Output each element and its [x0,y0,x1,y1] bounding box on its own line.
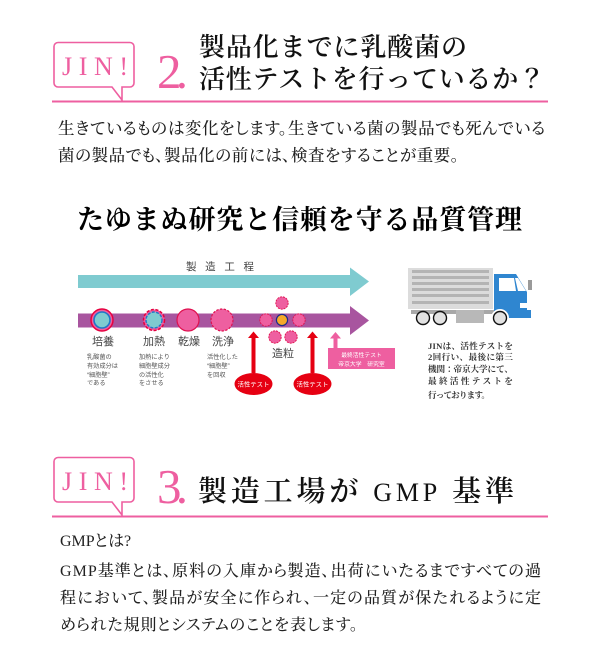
icon: culture circle [91,309,113,331]
step label: heating: の活性化 [139,371,164,379]
step label: heating [139,335,171,387]
section 2 header [52,33,548,102]
text block: section 3 body: GMP基準とは、原料の入庫から製造、出荷にいたるまですべての過 [60,561,541,580]
arrow and badge: activity test 1 [234,332,272,395]
step label: washing: 洗浄 [212,334,234,348]
speech bubble: JIN!: JIN! [62,467,128,496]
process diagram [78,260,532,400]
number 3: 3. [157,459,188,514]
step label: drying: 乾燥 [178,335,200,348]
arrow and badge: activity test 2 [294,332,332,395]
text block: truck note: 行っております。 [428,389,490,400]
speech bubble: JIN!: JIN! [62,52,128,81]
step label: washing: “細胞壁” [207,362,230,370]
step label: culture: 有効成分は [87,362,118,370]
speech bubble: JIN! [54,458,134,515]
text block: truck note: 機関：帝京大学にて、 [428,363,513,374]
heading: section 3: 製造工場が GMP 基準 [198,475,514,508]
text block: section 2 body [58,118,545,165]
heading: section 2 [199,33,545,94]
text block: section 3 body: 程において、製品が安全に作られ、一定の品質が保たれるように定 [60,588,541,607]
arrow and box: final activity test: 最終活性テスト [341,351,382,359]
heading: section 2: 活性テストを行っているか？ [199,65,545,94]
icon: granulation cluster [260,297,305,343]
arrow and box: final activity test [328,332,395,369]
arrow and badge: activity test 1: 活性テスト [238,380,269,388]
text block: truck note [428,340,513,400]
step label: culture: 培養 [92,335,114,348]
step label: culture: 乳酸菌の [87,353,112,361]
number 2: 2. [157,44,188,99]
arrow: purple process [78,306,369,335]
text block: truck note: 最終活性テストを [428,375,513,386]
step label: culture: “細胞壁” [87,371,110,379]
step label: washing: 活性化した [207,353,238,361]
text block: section 3 body: められた規則とシステムのことを表します。 [60,615,358,634]
pink rule [52,100,548,102]
step label: granulation: 造粒 [272,346,294,360]
heading: section 2: 製品化までに乳酸菌の [199,33,467,62]
text block: section 3 body: GMPとは? [60,533,131,550]
arrow and box: final activity test: 帝京大学 研究室 [338,360,385,368]
step label: culture [87,335,118,387]
text block: section 2 body: 生きているものは変化をします。生きている菌の製品でも死んでいる [58,118,545,138]
pink rule [52,516,548,518]
step label: heating: 加熱により [139,353,170,361]
step label: heating: をさせる [139,380,164,387]
arrow: teal process [78,268,369,296]
icon: washing circle [211,309,233,331]
step label: washing: を回収 [207,372,226,379]
text block: truck note: JINは、活性テストを [428,340,513,351]
speech bubble: JIN! [54,42,134,100]
arrow and badge: activity test 2: 活性テスト [297,380,328,388]
step label: heating: 加熱 [143,335,165,348]
icon: heating circle [144,310,164,330]
icon: truck [408,268,532,327]
text block: section 2 body: 菌の製品でも、製品化の前には、検査をすることが重要。 [58,145,459,165]
label: manufacturing process: 製造工程 [186,260,254,273]
section 3 header [52,458,548,518]
step label: washing [207,334,238,379]
title: quality control: たゆまぬ研究と信頼を守る品質管理 [77,205,522,235]
icon: drying circle [177,309,199,331]
text block: truck note: 2回行い、最後に第三 [428,351,513,362]
text block: section 3 body [60,533,541,634]
step label: culture: である [87,380,106,387]
step label: heating: 細胞壁成分 [139,362,171,370]
